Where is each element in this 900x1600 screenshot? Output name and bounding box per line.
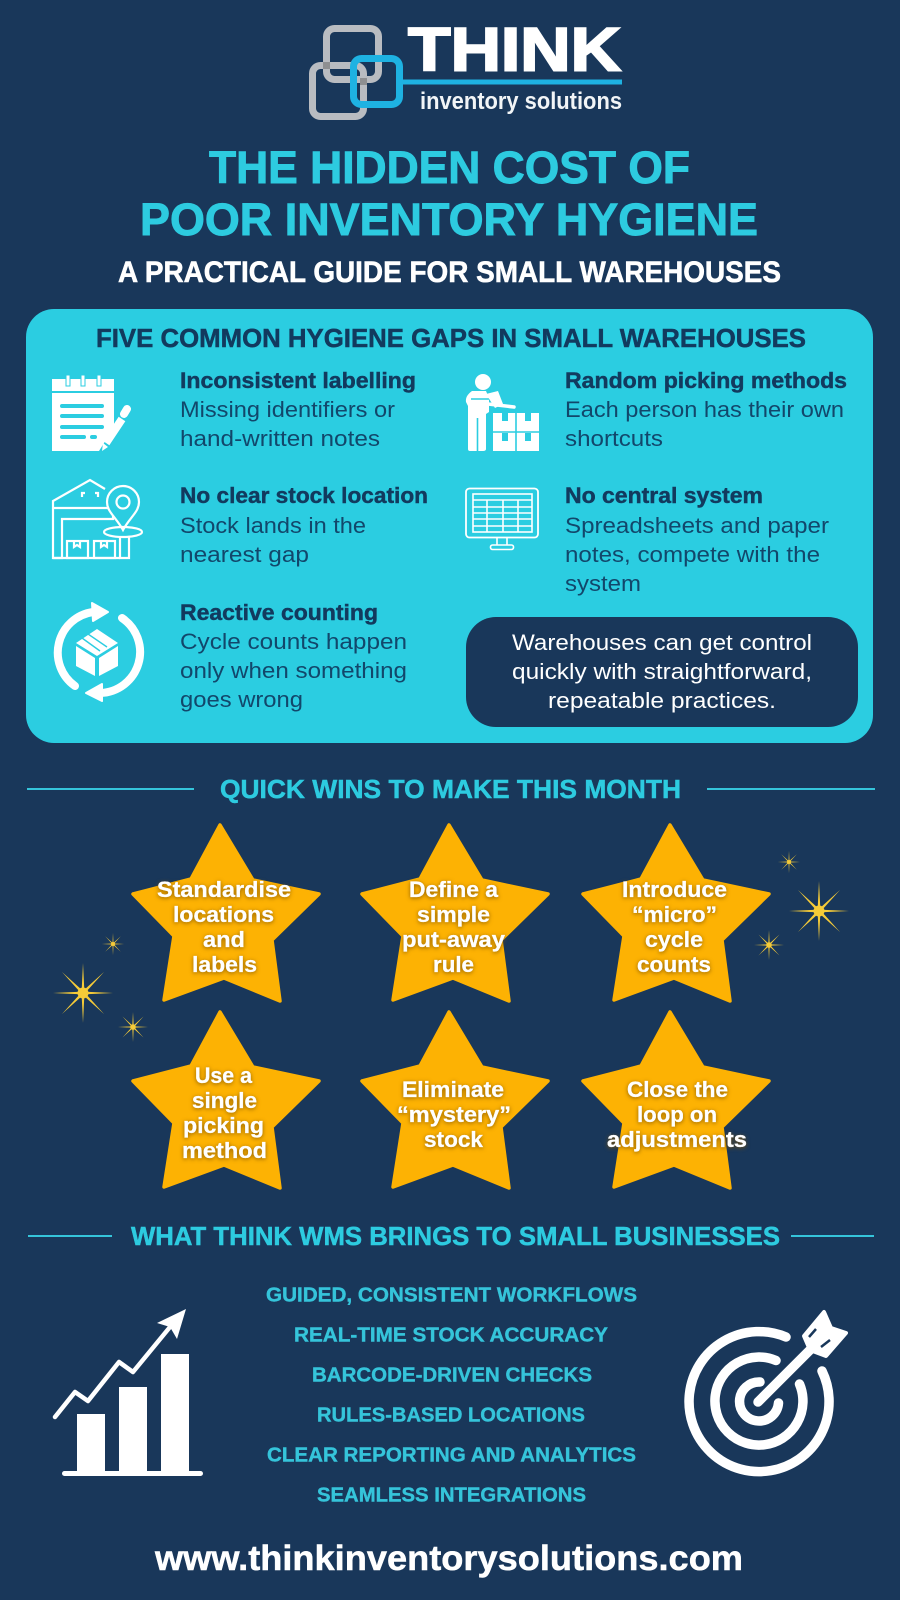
star: standardise locations and labels: labels — [192, 952, 257, 977]
icon: notepad and pencil — [52, 375, 127, 451]
star: use a single picking method: picking — [183, 1113, 264, 1138]
gap: no clear stock location: Stock lands in the — [180, 513, 366, 538]
callout — [466, 617, 858, 727]
gap: inconsistent labelling — [180, 368, 416, 451]
star: define a simple put-away rule: put-away — [402, 927, 506, 952]
gap: random picking methods: Each person has their own — [565, 397, 844, 422]
gap: no central system: Spreadsheets and paper — [565, 513, 829, 538]
icon: target with arrow — [689, 1312, 846, 1472]
sparkles left — [53, 933, 148, 1042]
star: introduce micro cycle counts: counts — [637, 952, 711, 977]
gap: random picking methods — [565, 368, 847, 451]
star: eliminate mystery stock: Eliminate — [402, 1077, 504, 1102]
star: eliminate mystery stock: stock — [424, 1127, 484, 1152]
section heading: what Think WMS brings: WHAT THINK WMS BRINGS TO SMALL BUSINESSES — [131, 1221, 780, 1251]
callout: repeatable practices. — [548, 688, 776, 713]
benefits list: BARCODE-DRIVEN CHECKS — [312, 1364, 592, 1386]
star: eliminate mystery stock: “mystery” — [397, 1102, 511, 1127]
star: use a single picking method: single — [192, 1088, 257, 1113]
gap: random picking methods: shortcuts — [565, 426, 663, 451]
gap: no clear stock location: nearest gap — [180, 542, 309, 567]
title: POOR INVENTORY HYGIENE — [140, 194, 758, 245]
gap: random picking methods: Random picking methods — [565, 368, 847, 393]
title: THE HIDDEN COST OF — [209, 142, 690, 193]
panel heading: FIVE COMMON HYGIENE GAPS IN SMALL WAREHOUSES — [96, 323, 806, 353]
benefits list: GUIDED, CONSISTENT WORKFLOWS — [266, 1284, 637, 1306]
gap: no central system — [565, 483, 829, 596]
sparkles right — [754, 851, 849, 960]
star: close the loop on adjustments: Close the — [627, 1077, 728, 1102]
callout: Warehouses can get control — [512, 630, 812, 655]
benefits list: CLEAR REPORTING AND ANALYTICS — [267, 1444, 636, 1466]
star: introduce micro cycle counts: cycle — [645, 927, 703, 952]
gap: reactive counting: Cycle counts happen — [180, 629, 407, 654]
section heading: quick wins: QUICK WINS TO MAKE THIS MONTH — [220, 774, 681, 804]
gap: reactive counting: only when something — [180, 658, 407, 683]
star: introduce micro cycle counts — [583, 825, 769, 1001]
benefits list: RULES-BASED LOCATIONS — [317, 1404, 585, 1426]
star: standardise locations and labels — [133, 825, 319, 1001]
website url: www.thinkinventorysolutions.com — [154, 1539, 743, 1578]
star: introduce micro cycle counts: Introduce — [622, 877, 727, 902]
benefits list — [266, 1284, 637, 1506]
icon: rising bar chart — [55, 1309, 203, 1476]
star: standardise locations and labels: Standardise — [157, 877, 291, 902]
gap: inconsistent labelling: Missing identifiers or — [180, 397, 395, 422]
star: define a simple put-away rule — [362, 825, 548, 1001]
star: close the loop on adjustments: loop on — [637, 1102, 717, 1127]
subtitle: A PRACTICAL GUIDE FOR SMALL WAREHOUSES — [118, 256, 781, 289]
gap: no central system: No central system — [565, 483, 763, 508]
star: use a single picking method: method — [182, 1138, 267, 1163]
star: eliminate mystery stock — [362, 1012, 548, 1188]
panel: five common hygiene gaps — [26, 309, 873, 743]
gap: inconsistent labelling: Inconsistent labelling — [180, 368, 416, 393]
callout: quickly with straightforward, — [512, 659, 812, 684]
gap: inconsistent labelling: hand-written notes — [180, 426, 380, 451]
star: close the loop on adjustments — [583, 1012, 769, 1188]
star: use a single picking method: Use a — [195, 1063, 253, 1088]
gap: reactive counting — [180, 600, 407, 712]
logo: Think Inventory Solutions: inventory solutions — [420, 88, 622, 115]
star: define a simple put-away rule: simple — [417, 902, 490, 927]
star: use a single picking method — [133, 1012, 319, 1188]
icon: cycle count box — [58, 603, 140, 701]
star: standardise locations and labels: and — [203, 927, 245, 952]
star: introduce micro cycle counts: “micro” — [632, 902, 717, 927]
gap: no clear stock location — [180, 483, 428, 567]
logo: Think Inventory Solutions — [312, 16, 622, 116]
star: close the loop on adjustments: adjustments — [607, 1127, 747, 1152]
star: define a simple put-away rule: Define a — [409, 877, 499, 902]
gap: reactive counting: goes wrong — [180, 687, 303, 712]
icon: warehouse with location pin — [53, 480, 142, 558]
icon: spreadsheet monitor — [466, 488, 538, 550]
gap: no central system: system — [565, 571, 641, 596]
benefits list: REAL-TIME STOCK ACCURACY — [294, 1324, 609, 1346]
benefits list: SEAMLESS INTEGRATIONS — [317, 1484, 586, 1506]
gap: no central system: notes, compete with the — [565, 542, 820, 567]
star: define a simple put-away rule: rule — [433, 952, 474, 977]
icon: worker with boxes — [466, 374, 539, 451]
logo: Think Inventory Solutions: THINK — [408, 16, 621, 84]
star: standardise locations and labels: locations — [173, 902, 274, 927]
gap: no clear stock location: No clear stock location — [180, 483, 428, 508]
gap: reactive counting: Reactive counting — [180, 600, 378, 625]
title — [140, 142, 758, 245]
